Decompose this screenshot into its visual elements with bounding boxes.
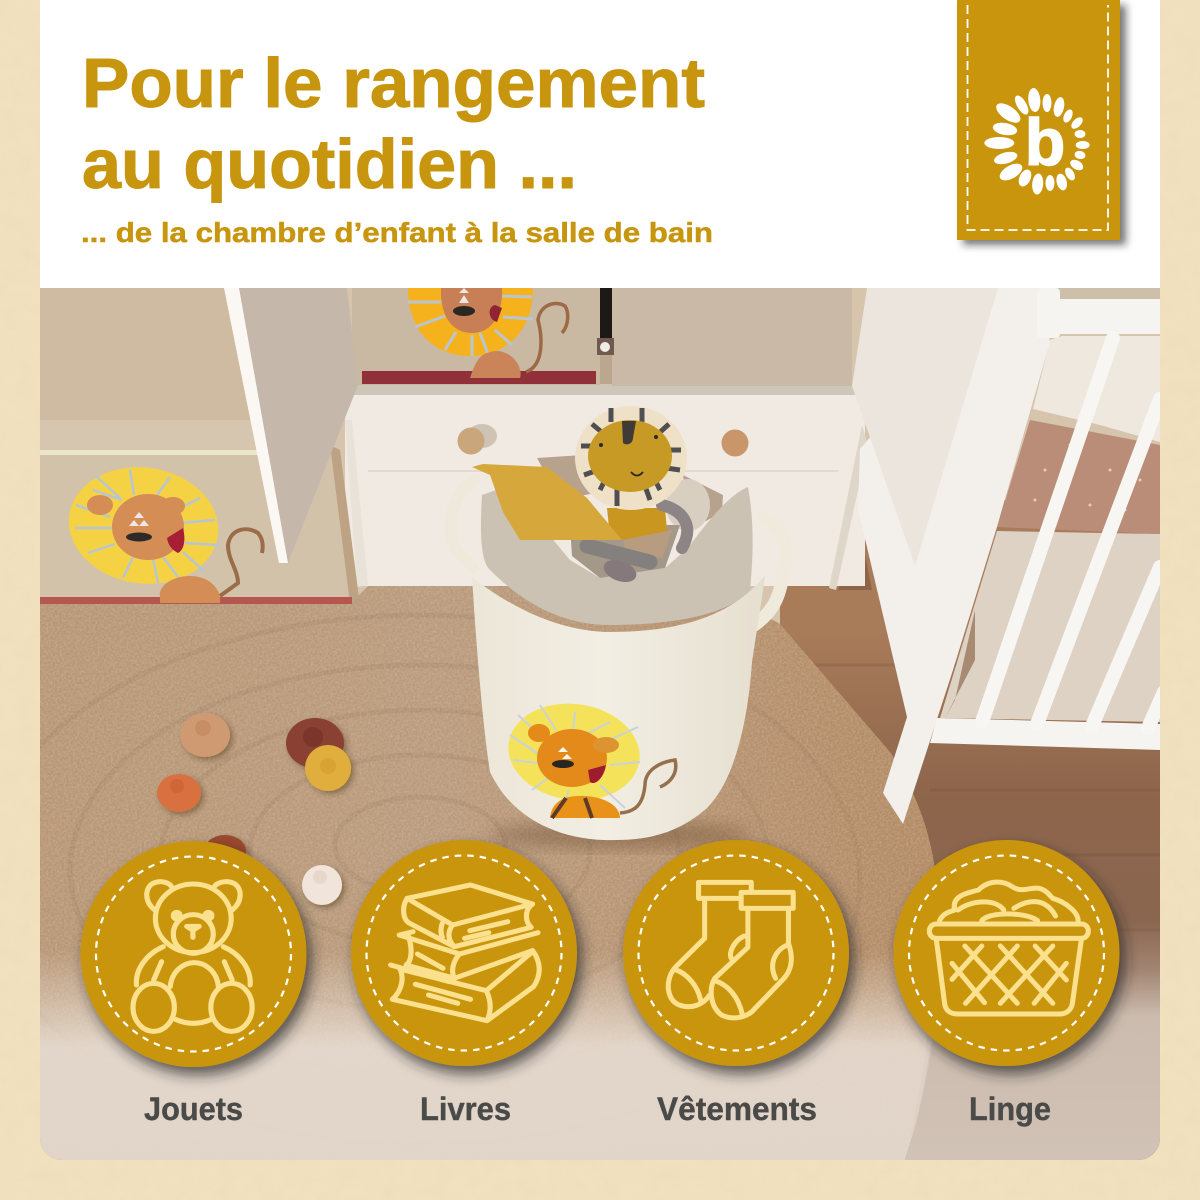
title: Pour le rangement	[82, 44, 705, 122]
yellow muslin cloth	[472, 464, 622, 540]
lion appliqué	[61, 458, 263, 603]
cabinet with drawer	[345, 385, 868, 590]
label: Linge: Linge	[969, 1091, 1051, 1127]
toy red-brown	[208, 834, 252, 856]
wooden stacking toys	[157, 713, 351, 905]
crib	[858, 288, 1164, 824]
icon: pair of socks	[668, 882, 793, 1018]
basket body	[472, 575, 765, 840]
badge: Linge	[894, 840, 1120, 1066]
label: Jouets: Jouets	[144, 1091, 243, 1127]
bottom fade over floor	[905, 920, 1160, 1160]
plush lion	[575, 406, 687, 586]
label: Vêtements: Vêtements	[657, 1091, 817, 1127]
toy white	[302, 865, 342, 905]
icon: teddy bear	[133, 882, 252, 1031]
title	[82, 44, 705, 203]
soft pouch behind plush	[666, 479, 710, 531]
icon: laundry basket	[929, 882, 1088, 1014]
wooden knobs	[458, 424, 748, 456]
bottom fade over rug	[40, 950, 940, 1160]
photo: nursery scene	[0, 288, 1164, 1160]
floor	[780, 500, 1160, 1160]
storage basket	[451, 406, 786, 849]
icon: stack of books	[391, 885, 539, 1021]
toy brown	[286, 718, 344, 768]
subtitle: ... de la chambre d’enfant à la salle de bain	[81, 217, 713, 248]
cabinet door right	[852, 288, 998, 566]
rug	[0, 585, 940, 1160]
upper right storage box	[612, 288, 852, 386]
badge: Jouets	[80, 841, 306, 1067]
cabinet door left	[224, 288, 358, 563]
basket handles	[451, 480, 475, 568]
gap and label tag	[597, 288, 614, 384]
brand ribbon with logo: b	[1025, 105, 1065, 179]
upper storage box with lion	[352, 288, 600, 385]
header panel	[40, 0, 1160, 289]
toy peach	[180, 713, 230, 757]
blanket inside basket	[481, 485, 753, 625]
toy orange	[157, 774, 201, 812]
waffle blanket behind	[537, 456, 723, 522]
badge: Livres	[351, 840, 577, 1066]
left storage boxes with lion	[40, 288, 359, 604]
basket lion	[502, 695, 676, 818]
label: Livres: Livres	[420, 1091, 511, 1127]
title: au quotidien ...	[82, 125, 577, 203]
toy yellow	[305, 745, 351, 791]
brand ribbon with logo	[957, 0, 1120, 240]
badge: Vêtements	[623, 840, 849, 1066]
icon: sunflower logo	[984, 88, 1090, 195]
